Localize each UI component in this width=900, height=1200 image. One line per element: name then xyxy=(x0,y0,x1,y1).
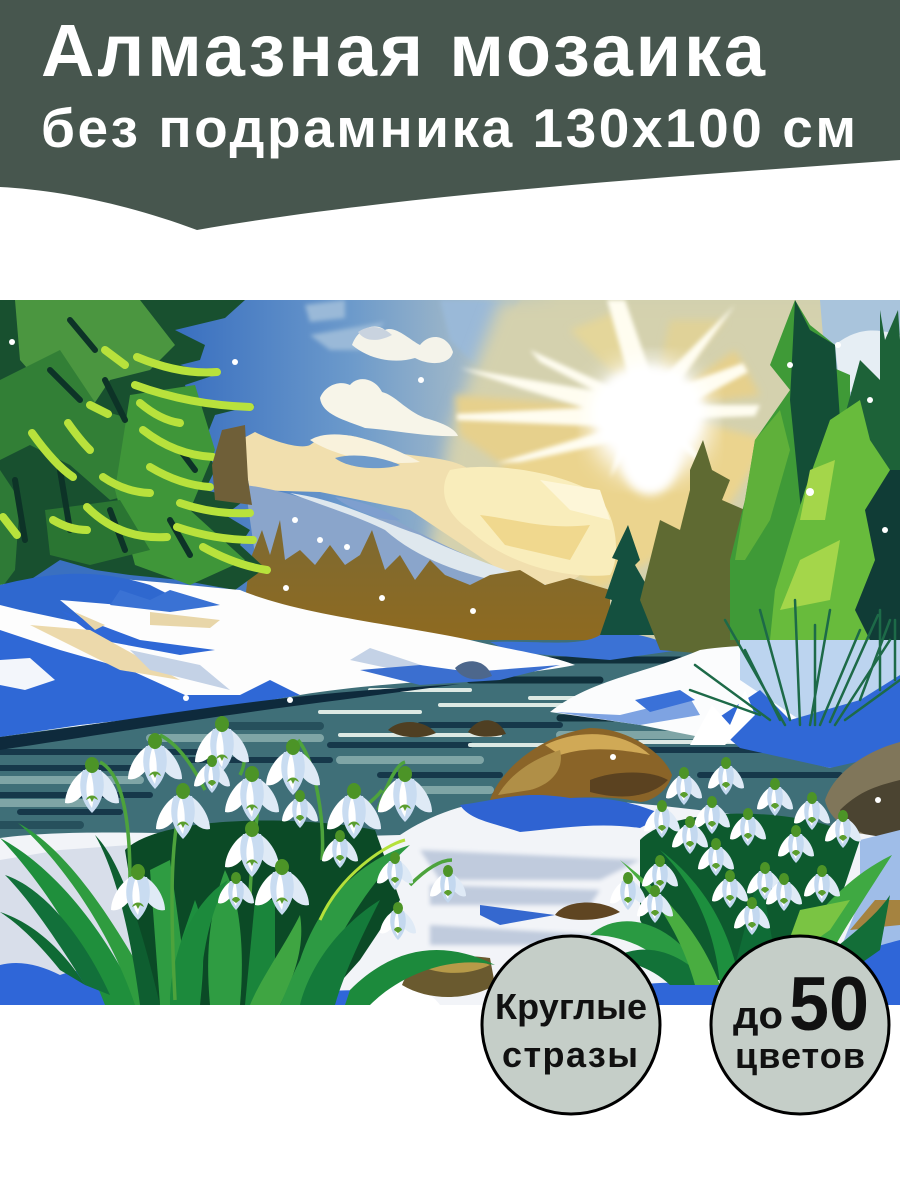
mountains xyxy=(245,485,600,610)
painting: winter landscape with snowdrops xyxy=(0,300,900,1005)
badge: round rhinestones: Круглые xyxy=(495,986,647,1027)
sun rays xyxy=(457,300,760,495)
right trees xyxy=(600,300,900,655)
rocks xyxy=(388,720,900,842)
right snow bank xyxy=(550,640,900,768)
river ripples xyxy=(0,660,840,825)
right snowdrop flowers xyxy=(610,757,861,935)
right leaves xyxy=(590,814,892,985)
badge: round rhinestones: стразы xyxy=(502,1034,638,1075)
title: Алмазная мозаика xyxy=(41,9,766,92)
left snow bank xyxy=(0,574,575,750)
badge: round rhinestones xyxy=(482,936,660,1114)
left stems xyxy=(100,735,452,1000)
left tree xyxy=(0,300,267,590)
distant forest xyxy=(240,520,610,645)
badge: up to 50 colours xyxy=(711,936,889,1114)
river xyxy=(0,640,900,840)
foreground rock xyxy=(402,956,495,997)
bare tree xyxy=(212,425,252,505)
badge: up to 50 colours: цветов xyxy=(735,1035,865,1076)
subtitle: без подрамника 130х100 см xyxy=(41,97,856,159)
sky xyxy=(0,300,900,640)
far snow xyxy=(490,633,680,660)
badge: up to 50 colours: до xyxy=(733,995,783,1037)
clouds xyxy=(240,326,616,590)
grass tuft xyxy=(690,600,900,725)
header banner xyxy=(0,0,900,230)
snowflakes xyxy=(9,339,888,803)
sunlight fan xyxy=(450,310,770,590)
foreground snow xyxy=(0,795,900,1005)
badge: up to 50 colours: 50 xyxy=(789,962,869,1047)
left snowdrop flowers xyxy=(65,716,466,940)
left leaves xyxy=(0,820,495,1005)
